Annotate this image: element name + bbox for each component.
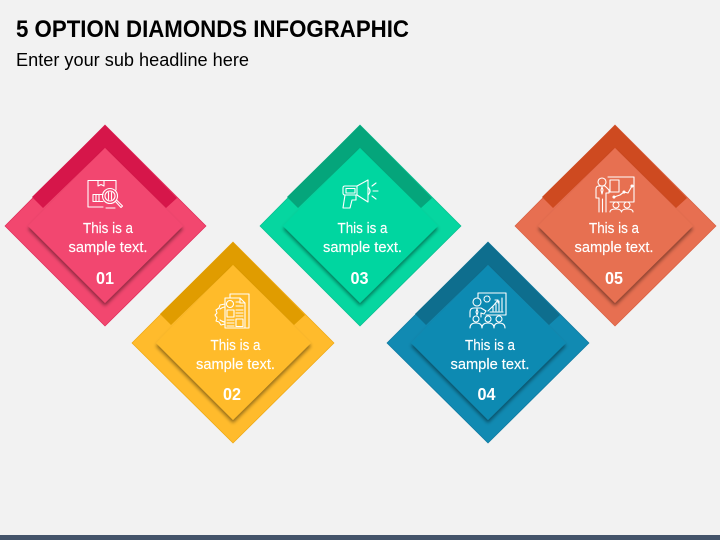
top band 02: [160, 242, 305, 325]
text 02: This is a: [210, 338, 261, 354]
icon: box with magnifier: [88, 180, 122, 208]
outer diamond 04: [387, 242, 589, 443]
top band 03: [287, 125, 432, 208]
icon: megaphone: [343, 180, 378, 208]
subtitle: Enter your sub headline here: [16, 50, 249, 70]
panel: diamond 04: [387, 242, 589, 443]
panel: diamond 02: [132, 242, 334, 443]
icon: presenter with chart: [596, 177, 634, 212]
number 05: 05: [605, 268, 623, 288]
outer diamond 01: [5, 125, 206, 326]
panel: diamond 05: [515, 125, 716, 326]
outer diamond 05: [515, 125, 716, 326]
number 04: 04: [478, 384, 496, 404]
inner diamond 02: [156, 265, 311, 420]
inner diamond 05: [538, 148, 693, 303]
title: 5 OPTION DIAMONDS INFOGRAPHIC: [16, 16, 409, 43]
panel: diamond 05: sample text.: [574, 240, 654, 256]
top band 01: [32, 125, 177, 208]
footer bar: [0, 535, 720, 540]
text 03: This is a: [338, 221, 388, 237]
icon: presenter with audience: [470, 293, 506, 328]
panel: diamond 03: sample text.: [323, 240, 402, 256]
inner diamond 04: [411, 265, 566, 420]
number 03: 03: [350, 268, 369, 288]
panel: diamond 01: [5, 125, 206, 326]
icon: documents with gear: [215, 294, 249, 328]
outer diamond 03: [260, 125, 461, 326]
text 04: This is a: [465, 338, 516, 354]
inner diamond 03: [283, 148, 438, 303]
outer diamond 02: [132, 242, 334, 443]
text 01: This is a: [83, 221, 134, 237]
panel: diamond 02: sample text.: [196, 357, 275, 373]
text 05: This is a: [589, 221, 640, 237]
number 02: 02: [223, 384, 241, 404]
number 01: 01: [96, 268, 114, 288]
panel: diamond 03: [260, 125, 461, 326]
panel: diamond 01: sample text.: [68, 240, 148, 256]
top band 05: [542, 125, 687, 208]
inner diamond 01: [28, 148, 183, 303]
top band 04: [415, 242, 560, 325]
panel: diamond 04: sample text.: [450, 357, 530, 373]
